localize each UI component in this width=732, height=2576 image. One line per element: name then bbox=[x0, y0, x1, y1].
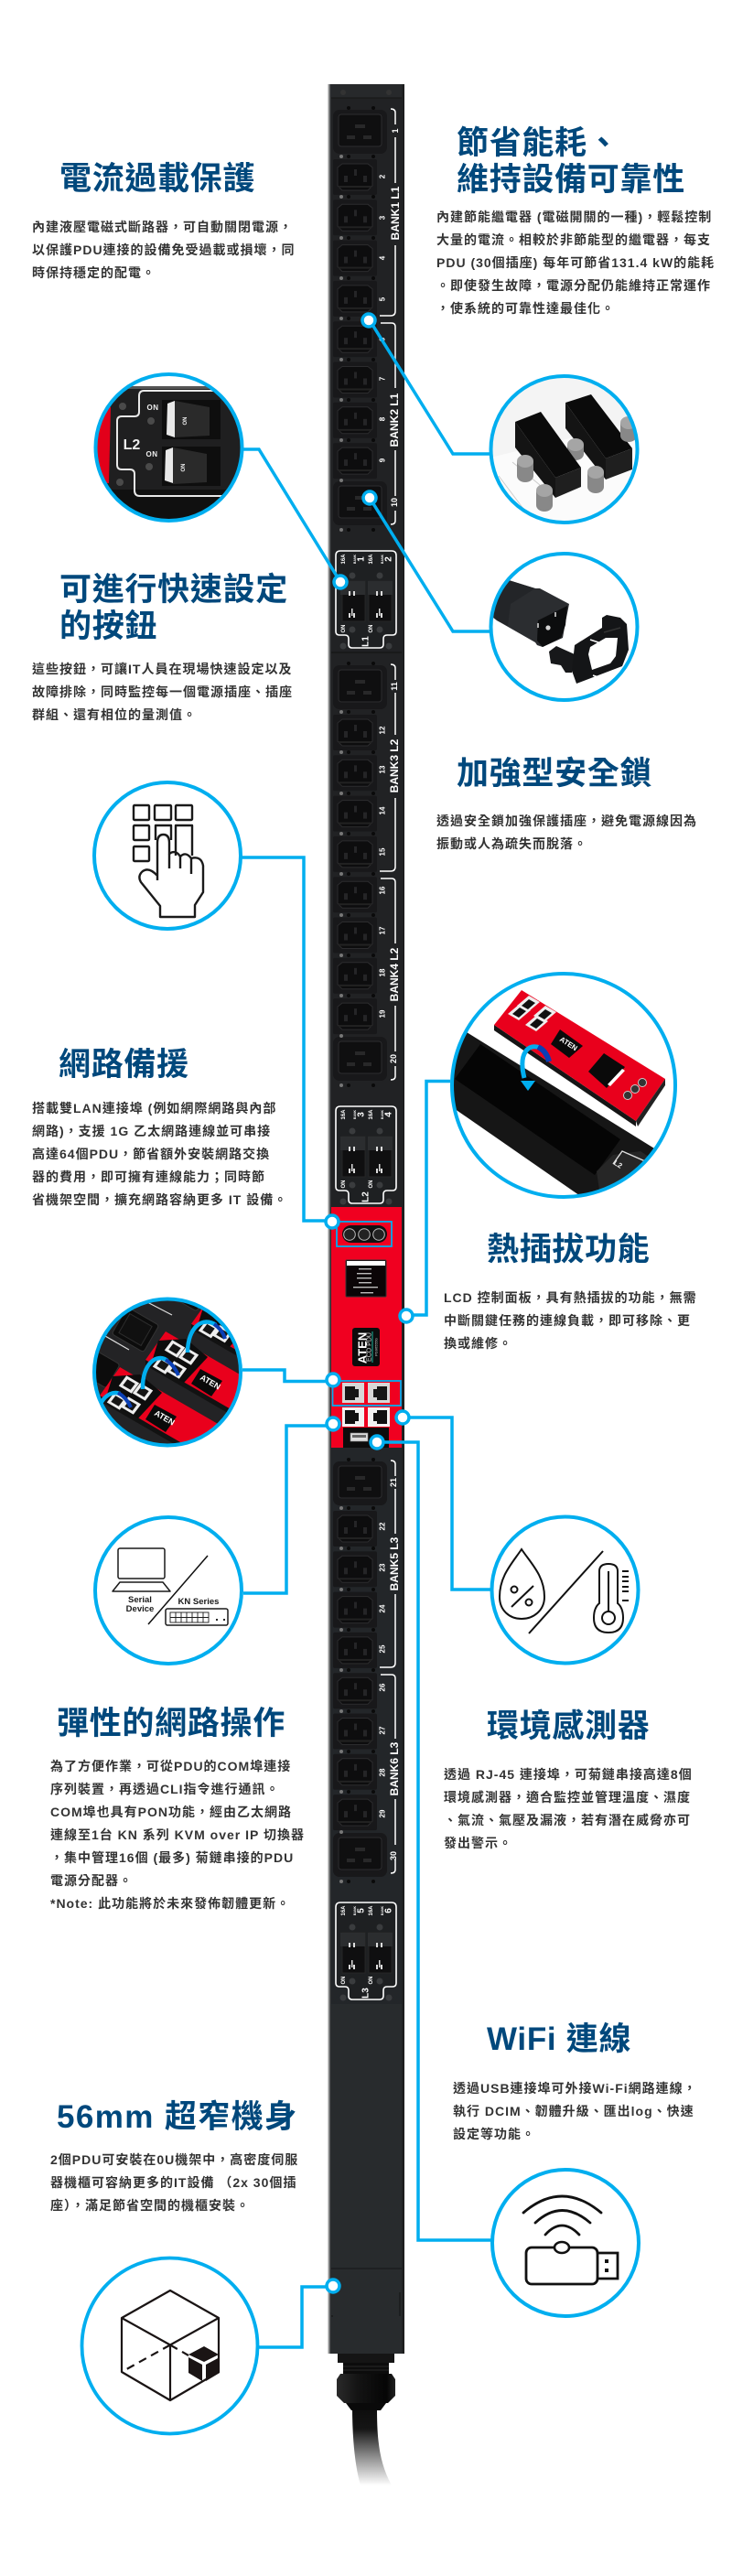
connector: environment sensors bbox=[403, 1417, 491, 1590]
text: flexible network operation: ，集中管理16個 (最多) 菊鏈串接的PDU bbox=[50, 1850, 294, 1865]
connector: quick setup buttons bbox=[242, 857, 332, 1221]
bank labels 1-10: 6 bbox=[379, 337, 386, 341]
icon: humidity and temperature bbox=[492, 1517, 639, 1664]
title: overload protection: 電流過載保護 bbox=[59, 161, 255, 197]
breaker panel labels: BANK bbox=[353, 554, 357, 564]
bank labels 11-20: 11 bbox=[390, 682, 399, 691]
text: energy saving: ，使系統的可靠性達最佳化。 bbox=[436, 301, 615, 316]
bank labels 21-30: 26 bbox=[379, 1683, 386, 1691]
bank labels 21-30: 24 bbox=[379, 1604, 386, 1612]
connector: energy-saving relays bbox=[370, 320, 491, 454]
bank labels 21-30: BANK5 L3 bbox=[388, 1536, 401, 1590]
text: flexible network operation: *Note: 此功能將於未來發佈韌體更新。 bbox=[50, 1896, 290, 1911]
text: energy saving: PDU (30個插座) 每年可節省131.4 kW的能耗 bbox=[436, 255, 715, 270]
text: network redundancy: 省機架空間，擴充網路容納更多 IT 設備。 bbox=[32, 1192, 287, 1207]
text: network redundancy bbox=[32, 1101, 287, 1207]
breaker panel labels: 6 bbox=[384, 1908, 393, 1913]
breaker panel labels: 16A bbox=[341, 1905, 347, 1916]
breaker panel labels bbox=[341, 554, 393, 1999]
text: overload protection: 內建液壓電磁式斷路器，可自動關閉電源， bbox=[32, 220, 293, 234]
bank labels 21-30: 25 bbox=[379, 1644, 386, 1653]
text: slim body: 座），滿足節省空間的機櫃安裝。 bbox=[50, 2198, 250, 2213]
breaker panel labels: ON bbox=[341, 624, 347, 633]
breaker panel labels: BANK bbox=[353, 1905, 357, 1915]
bank labels 11-20: 13 bbox=[379, 765, 386, 773]
bank labels 21-30 bbox=[379, 1460, 401, 1873]
connector: slim body bbox=[259, 2287, 333, 2347]
breaker panel labels: BANK bbox=[381, 1905, 384, 1915]
icon: serial device and KN series: Device bbox=[126, 1604, 154, 1614]
breaker panel labels: 3 bbox=[357, 1112, 366, 1117]
bank labels 1-10: 4 bbox=[379, 255, 386, 260]
bank labels 11-20: 12 bbox=[379, 726, 386, 734]
title: quick setup buttons: 可進行快速設定 bbox=[59, 572, 288, 608]
icon: breaker switches: ON bbox=[181, 463, 187, 472]
PDU body bbox=[328, 84, 404, 2354]
icon: serial device and KN series bbox=[95, 1517, 242, 1664]
icon: breaker switches: L2 bbox=[124, 437, 140, 453]
text: quick setup buttons: 這些按鈕，可讓IT人員在現場快速設定以及 bbox=[32, 662, 292, 676]
title: wifi: WiFi 連線 bbox=[487, 2021, 631, 2057]
title: locking outlets: 加強型安全鎖 bbox=[457, 756, 652, 792]
title: environment sensors: 環境感測器 bbox=[487, 1708, 651, 1744]
bank labels 21-30: 22 bbox=[379, 1522, 386, 1530]
bank labels 11-20: 19 bbox=[379, 1009, 386, 1018]
text: network redundancy: 搭載雙LAN連接埠 (例如網際網路與內部 bbox=[32, 1101, 276, 1116]
text: energy saving: 。即使發生故障，電源分配仍能維持正常運作 bbox=[436, 278, 711, 293]
breaker panel labels: 16A bbox=[341, 554, 347, 565]
power cable and gland bbox=[337, 2354, 395, 2485]
icon: breaker switches: ON bbox=[146, 404, 159, 412]
text: flexible network operation: COM埠也具有PON功能，經由乙太網路 bbox=[50, 1805, 292, 1819]
bank labels 21-30: 27 bbox=[379, 1726, 386, 1734]
text: flexible network operation bbox=[50, 1759, 305, 1911]
breaker panel labels: 2 bbox=[384, 556, 393, 562]
icon: hot swap LCD module: L2 bbox=[612, 1159, 624, 1170]
text: environment sensors: 透過 RJ-45 連接埠，可菊鏈串接高達8個 bbox=[444, 1767, 693, 1782]
breaker panel labels: L2 bbox=[361, 1191, 371, 1202]
connector: locking outlets bbox=[370, 498, 491, 631]
title: energy saving bbox=[457, 125, 685, 198]
text: wifi: 執行 DCIM、韌體升級、匯出log、快速 bbox=[453, 2104, 694, 2118]
title: energy saving: 維持設備可靠性 bbox=[457, 161, 685, 198]
breaker panel labels: ON bbox=[369, 624, 374, 633]
bank labels 1-10 bbox=[379, 109, 402, 524]
title: quick setup buttons: 的按鈕 bbox=[59, 608, 157, 644]
bank labels 11-20: BANK3 L2 bbox=[388, 738, 401, 792]
title: quick setup buttons bbox=[59, 572, 288, 644]
anchor dots bbox=[326, 314, 413, 2292]
icon: breaker switches: ON bbox=[183, 417, 188, 425]
text: environment sensors: 發出警示。 bbox=[444, 1836, 512, 1850]
text: flexible network operation: 電源分配器。 bbox=[50, 1873, 133, 1888]
bank labels 1-10: 7 bbox=[379, 376, 386, 381]
red control panel bbox=[331, 1207, 402, 1448]
bank labels 1-10: 8 bbox=[379, 416, 386, 421]
red control panel: ECO PDU bbox=[366, 1332, 373, 1362]
connector: flexible network operation bbox=[243, 1426, 333, 1593]
text: flexible network operation: 序列裝置，再透過CLI指令進行通訊。 bbox=[50, 1782, 280, 1796]
breaker panel labels: BANK bbox=[381, 1109, 384, 1119]
icon: serial device and KN series: Serial bbox=[128, 1595, 152, 1605]
icon: relays bbox=[490, 376, 640, 523]
bank labels 1-10: 10 bbox=[390, 498, 399, 507]
breaker panel labels: 16A bbox=[369, 1905, 374, 1916]
text: wifi: 設定等功能。 bbox=[453, 2127, 535, 2141]
title: flexible network operation: 彈性的網路操作 bbox=[57, 1706, 285, 1741]
breaker panel labels: ON bbox=[369, 1977, 374, 1984]
bank labels 1-10: BANK2 L1 bbox=[388, 393, 401, 447]
bank labels 1-10: 1 bbox=[391, 128, 400, 134]
text: slim body: 器機櫃可容納更多的IT設備 （2x 30個插 bbox=[50, 2175, 296, 2190]
icon: keypad and hand bbox=[94, 782, 241, 929]
bank labels 1-10: 5 bbox=[379, 296, 386, 301]
text: quick setup buttons bbox=[32, 662, 293, 722]
bank labels 21-30: 30 bbox=[389, 1851, 398, 1860]
text: quick setup buttons: 群組、還有相位的量測值。 bbox=[32, 707, 197, 722]
bank labels 21-30: 29 bbox=[379, 1809, 386, 1817]
text: network redundancy: 高達64個PDU，節省額外安裝網路交換 bbox=[32, 1147, 270, 1161]
icon: locking plug and retainer bbox=[485, 554, 637, 700]
bank labels 11-20: 17 bbox=[379, 926, 386, 934]
bank labels 1-10: 2 bbox=[379, 174, 386, 178]
text: wifi bbox=[453, 2081, 697, 2141]
icon: hot swap LCD module bbox=[439, 974, 675, 1208]
bank labels 11-20: 14 bbox=[379, 806, 386, 814]
text: network redundancy: 器的費用，即可擁有連線能力；同時節 bbox=[32, 1169, 265, 1184]
text: energy saving bbox=[436, 210, 715, 316]
text: hot swap: 換或維修。 bbox=[444, 1336, 512, 1351]
bank labels 11-20: 15 bbox=[379, 847, 386, 856]
breaker panel labels: 16A bbox=[369, 554, 374, 565]
text: environment sensors: 環境感測器，適合監控並管理溫度、濕度 bbox=[444, 1790, 691, 1805]
title: network redundancy: 網路備援 bbox=[59, 1047, 189, 1083]
text: locking outlets bbox=[436, 814, 697, 851]
bank labels 21-30: BANK6 L3 bbox=[388, 1741, 401, 1795]
icon: USB wifi dongle bbox=[492, 2170, 639, 2316]
text: slim body: 2個PDU可安裝在0U機架中，高密度伺服 bbox=[50, 2152, 298, 2167]
breaker panel labels: ON bbox=[369, 1180, 374, 1188]
icon: cube in box bbox=[82, 2258, 258, 2434]
text: overload protection: 以保護PDU連接的設備免受過載或損壞，同 bbox=[32, 243, 296, 257]
bank labels 1-10: BANK1 L1 bbox=[389, 186, 402, 240]
bank labels 21-30: 28 bbox=[379, 1768, 386, 1776]
breaker panel labels: BANK bbox=[381, 554, 384, 564]
red control panel: ATEN bbox=[355, 1332, 370, 1363]
bank labels 11-20: 16 bbox=[379, 886, 386, 894]
text: quick setup buttons: 故障排除，同時監控每一個電源插座、插座 bbox=[32, 684, 293, 699]
text: hot swap: LCD 控制面板，具有熱插拔的功能，無需 bbox=[444, 1290, 697, 1305]
text: environment sensors: 、氣流、氣壓及漏液，若有潛在威脅亦可 bbox=[444, 1813, 691, 1827]
icon: breaker switches bbox=[92, 374, 247, 526]
icon: serial device and KN series: KN Series bbox=[178, 1597, 219, 1607]
text: environment sensors bbox=[444, 1767, 693, 1850]
text: overload protection bbox=[32, 220, 296, 280]
connector: network redundancy bbox=[242, 1370, 333, 1382]
title: hot swap: 熱插拔功能 bbox=[487, 1232, 651, 1267]
red control panel: PG96555G bbox=[373, 1338, 379, 1356]
text: energy saving: 大量的電流。相較於非節能型的繼電器，每支 bbox=[436, 232, 711, 247]
breaker panel labels: BANK bbox=[353, 1109, 357, 1119]
text: hot swap bbox=[444, 1290, 697, 1351]
title: energy saving: 節省能耗、 bbox=[457, 125, 620, 161]
text: slim body bbox=[50, 2152, 298, 2213]
breaker panel labels: ON bbox=[341, 1977, 347, 1984]
breaker panel labels: L1 bbox=[361, 636, 371, 647]
breaker panel labels: L3 bbox=[361, 1988, 371, 1999]
text: flexible network operation: 為了方便作業，可從PDU的COM埠連接 bbox=[50, 1759, 291, 1773]
breaker panel labels: 16A bbox=[341, 1109, 347, 1120]
connector: wifi bbox=[377, 1442, 492, 2240]
text: energy saving: 內建節能繼電器 (電磁開關的一種)，輕鬆控制 bbox=[436, 210, 712, 224]
icon: daisy-chained PDUs bbox=[92, 1298, 242, 1448]
breaker panel labels: 1 bbox=[357, 556, 366, 562]
breaker panel labels: 4 bbox=[384, 1112, 393, 1117]
icon: breaker switches: ON bbox=[146, 450, 157, 458]
connector: hot swap bbox=[406, 1082, 450, 1315]
text: network redundancy: 網路)，支援 1G 乙太網路連線並可串接 bbox=[32, 1124, 271, 1138]
bank labels 11-20: BANK4 L2 bbox=[388, 947, 401, 1001]
text: flexible network operation: 連線至1台 KN 系列 KVM over IP 切換器 bbox=[50, 1827, 305, 1842]
PDU strip, connectors and icon circles bbox=[81, 84, 677, 2484]
icon: hot swap LCD module: ATEN bbox=[558, 1035, 579, 1052]
bank labels 1-10: 9 bbox=[379, 458, 386, 462]
bank labels 11-20: 18 bbox=[379, 968, 386, 976]
breaker panel labels: 16A bbox=[369, 1109, 374, 1120]
text: locking outlets: 透過安全鎖加強保護插座，避免電源線因為 bbox=[436, 814, 697, 828]
text: hot swap: 中斷關鍵任務的連線負載，即可移除、更 bbox=[444, 1313, 691, 1328]
bank labels 21-30: 21 bbox=[389, 1478, 398, 1487]
bank labels 21-30: 23 bbox=[379, 1563, 386, 1571]
text: wifi: 透過USB連接埠可外接Wi-Fi網路連線， bbox=[453, 2081, 697, 2096]
text: locking outlets: 振動或人為疏失而脫落。 bbox=[436, 836, 587, 851]
breaker panel labels: ON bbox=[341, 1180, 347, 1188]
breaker panel labels: 5 bbox=[357, 1908, 366, 1913]
connector: overload protection (left breaker callout) bbox=[243, 449, 340, 582]
bank labels 1-10: 3 bbox=[379, 215, 386, 220]
bank labels 11-20 bbox=[379, 664, 401, 1080]
bank labels 11-20: 20 bbox=[389, 1054, 398, 1063]
title: slim body: 56mm 超窄機身 bbox=[57, 2099, 298, 2135]
text: overload protection: 時保持穩定的配電。 bbox=[32, 265, 156, 280]
